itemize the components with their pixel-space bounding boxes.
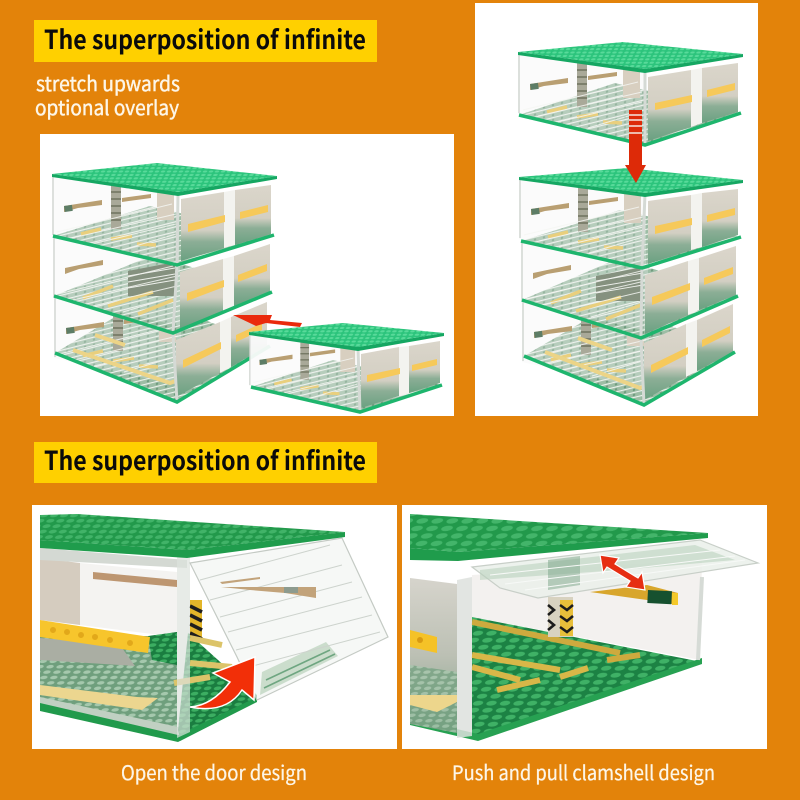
panel: side stacking photo (40, 134, 454, 416)
stacked box: third layer (521, 241, 738, 338)
glass corner post (177, 552, 190, 738)
stacked box: bottom layer (522, 300, 735, 405)
back wall (472, 560, 702, 660)
panel: open door close-up (32, 505, 397, 749)
bottom plate edge (40, 697, 257, 742)
yellow brick bar (40, 620, 150, 653)
opened door (190, 538, 388, 700)
text block: stretch upwards, optional overlay: stretch upwards (36, 68, 180, 97)
text block: stretch upwards, optional overlay: optional overlay (35, 92, 180, 121)
floor seen through glass (40, 632, 178, 741)
stacked box: top layer (52, 163, 277, 265)
title banner: top: The superposition of infinite (44, 20, 366, 57)
arrow: lower the box down (625, 110, 646, 183)
green top plate (410, 514, 708, 561)
single box beside the stack (249, 323, 444, 412)
arrow: door swing (190, 657, 255, 709)
yellow floor lines (174, 638, 232, 683)
green top plate (40, 514, 345, 558)
hazard pillar (190, 600, 202, 639)
caption: open the door: Open the door design (121, 757, 307, 786)
yellow beam with exit sign (590, 585, 678, 605)
yellow floor lines (472, 622, 640, 690)
caption: push and pull: Push and pull clamshell design (452, 757, 715, 786)
text block: stretch upwards, optional overlay (35, 68, 180, 121)
panel: vertical stacking photo (475, 3, 758, 416)
arrow: push and pull (600, 555, 645, 590)
interior wall (40, 548, 187, 637)
single box above the stack (518, 42, 743, 145)
arrow: slide in from right (233, 315, 302, 327)
title banner: lower: The superposition of infinite (44, 441, 366, 478)
bottom plate edge (410, 658, 702, 741)
stacked box: bottom layer (54, 296, 270, 402)
glass left section (410, 577, 472, 738)
panel: clamshell door close-up (402, 505, 767, 749)
stacked box: second layer (519, 168, 743, 268)
stacked box: middle layer (53, 236, 272, 333)
raised clamshell door (472, 540, 758, 660)
hazard pillar (548, 597, 573, 637)
green baseplate floor (472, 617, 702, 738)
green baseplate floor (178, 633, 257, 741)
